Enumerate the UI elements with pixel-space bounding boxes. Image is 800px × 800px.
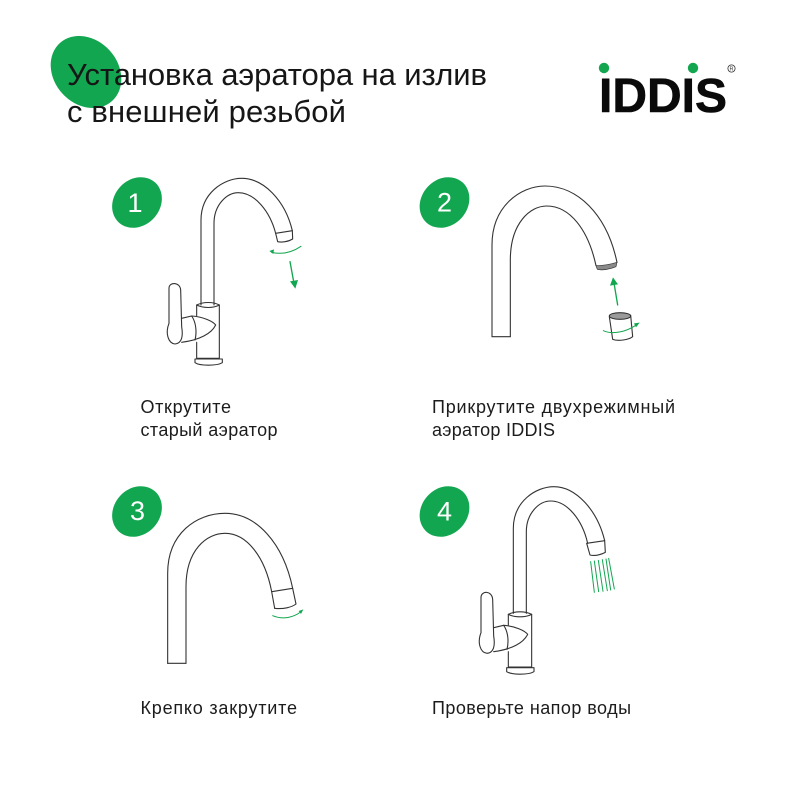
step 3 caption: Крепко закрутите xyxy=(140,698,297,718)
step 1 rotation arrow xyxy=(269,246,301,254)
step 1 number badge: 1 xyxy=(127,188,143,218)
step 3 panel xyxy=(102,476,303,718)
step 2 spout illustration xyxy=(492,186,617,337)
step 1 number badge xyxy=(102,167,172,238)
title text: с внешней резьбой xyxy=(67,94,346,129)
step 1 caption: Открутите xyxy=(140,397,231,417)
step 2 number badge: 2 xyxy=(437,188,452,218)
step 3 number badge xyxy=(102,476,172,547)
step 2 aerator xyxy=(609,313,633,340)
step 1 panel xyxy=(102,167,301,440)
step 4 caption: Проверьте напор воды xyxy=(432,698,631,718)
title green blob xyxy=(36,22,136,122)
step 3 rotation arrow xyxy=(273,609,303,618)
title text: Установка аэратора на излив xyxy=(67,57,487,92)
step 2 panel xyxy=(409,167,675,440)
step 4 faucet illustration xyxy=(479,487,605,674)
step 1 down arrow xyxy=(290,262,298,289)
step 2 rotation arrow xyxy=(603,323,640,333)
step 1 faucet illustration xyxy=(167,178,293,365)
logo: IDDIS: IDDIS xyxy=(599,70,727,123)
step 3 number badge: 3 xyxy=(130,496,145,526)
step 1 caption: старый аэратор xyxy=(140,420,278,440)
step 2 up arrow xyxy=(610,277,618,305)
step 1 caption xyxy=(140,397,278,440)
step 2 caption: аэратор IDDIS xyxy=(432,420,555,440)
step 4 panel xyxy=(409,476,631,718)
step 4 number badge xyxy=(409,476,480,547)
step 3 spout illustration xyxy=(168,513,296,663)
title text xyxy=(67,57,487,129)
title xyxy=(36,22,487,129)
step 2 caption xyxy=(432,397,675,440)
logo: IDDIS: R xyxy=(730,66,734,72)
step 4 water stream xyxy=(591,558,614,592)
step 2 number badge xyxy=(409,167,480,238)
step 4 number badge: 4 xyxy=(437,496,452,526)
step 2 caption: Прикрутите двухрежимный xyxy=(432,397,675,417)
